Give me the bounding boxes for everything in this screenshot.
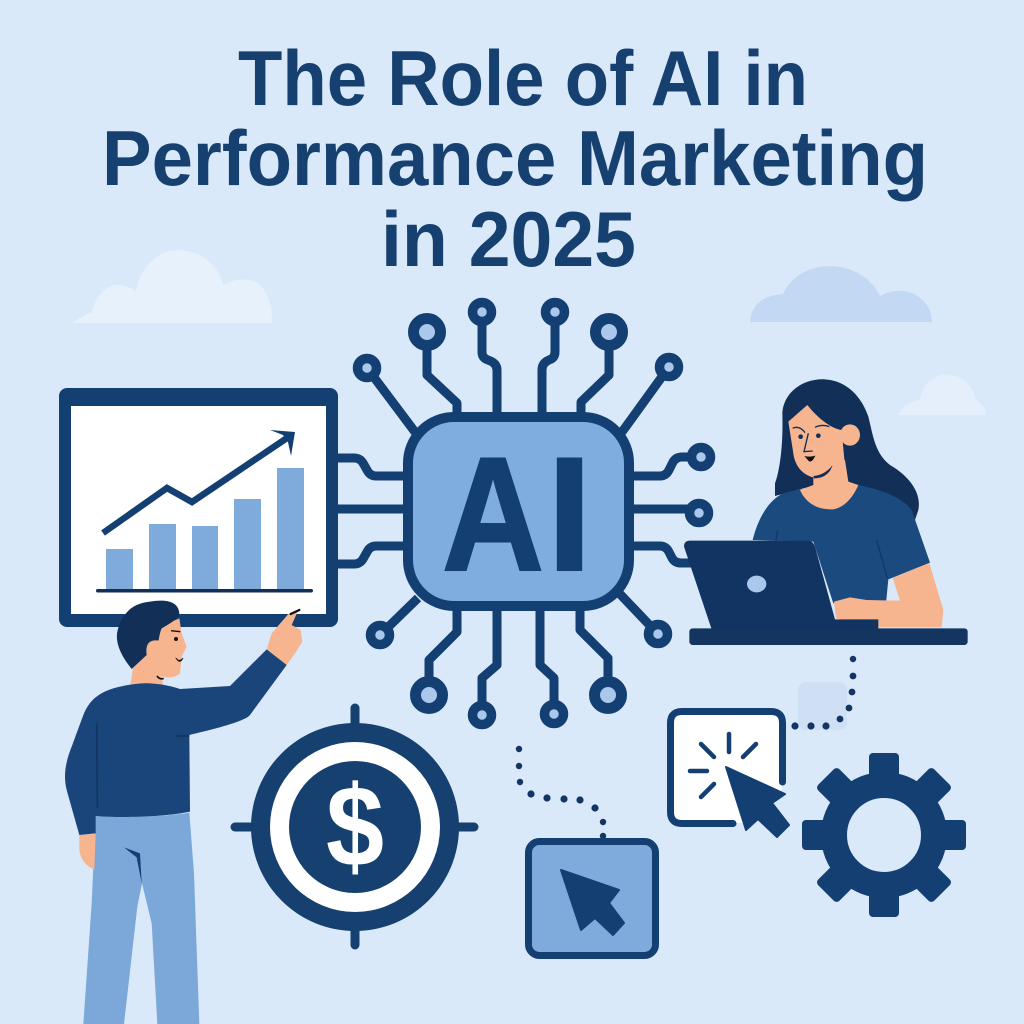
laptop [684, 541, 878, 629]
monitor with growth chart [59, 388, 338, 627]
target with dollar sign [235, 708, 474, 945]
trend arrow [103, 430, 295, 533]
desk [689, 628, 968, 645]
title [102, 34, 928, 283]
target with dollar sign: $ [326, 763, 384, 891]
bar chart [106, 468, 304, 589]
click box [670, 711, 789, 837]
cloud: upper left [72, 250, 272, 323]
circuit nodes [358, 302, 710, 724]
dotted connector: desk to click box [791, 656, 856, 730]
woman at laptop [684, 379, 968, 645]
gear icon [802, 753, 966, 917]
cursor button [528, 842, 656, 956]
AI chip: I [547, 424, 592, 605]
AI chip [408, 417, 629, 606]
pale square behind connector [798, 682, 847, 730]
title: in 2025 [381, 195, 636, 283]
dotted connector: to cursor button [516, 746, 606, 839]
cloud: small right [898, 374, 986, 415]
title: The Role of AI in [238, 34, 808, 122]
AI chip: A [442, 424, 544, 605]
cloud: upper right [750, 266, 932, 322]
title: Performance Marketing [102, 114, 928, 202]
person pointing at chart [65, 601, 302, 1024]
circuit traces [335, 320, 700, 705]
